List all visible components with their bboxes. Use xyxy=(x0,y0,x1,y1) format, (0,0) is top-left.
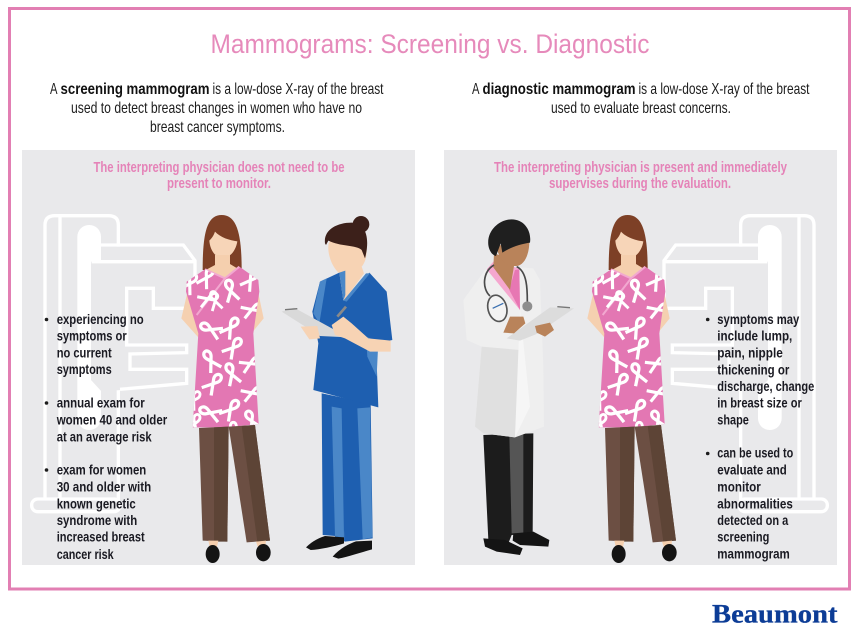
bullet list: screening: symptoms xyxy=(57,362,112,377)
bullet list: diagnostic: mammogram xyxy=(717,546,790,561)
intro text: screening: breast cancer symptoms. xyxy=(150,119,285,136)
bullet list: diagnostic: shape xyxy=(717,412,749,427)
bullet list: screening: cancer risk xyxy=(57,547,114,562)
bullet list: diagnostic: symptoms may xyxy=(717,312,800,327)
bullet list: diagnostic: include lump, xyxy=(717,329,792,344)
bullet list: diagnostic: detected on a xyxy=(717,513,789,528)
icon: mammography machine xyxy=(664,216,827,512)
intro text: screening: screening mammogram xyxy=(60,81,210,98)
panel: screening xyxy=(22,150,415,565)
panel background xyxy=(22,150,415,565)
panel heading: supervises during the evaluation. xyxy=(549,176,731,192)
bullet list: diagnostic xyxy=(706,312,815,561)
bullet list: diagnostic: in breast size or xyxy=(717,396,802,411)
title: Mammograms: Screening vs. Diagnostic xyxy=(210,29,650,59)
intro text: diagnostic: A xyxy=(472,81,480,98)
logo: Beaumont: Beaumont xyxy=(712,598,838,628)
bullet list: diagnostic: thickening or xyxy=(717,362,790,377)
icon: mammography machine xyxy=(32,216,195,512)
bullet list: screening: annual exam for xyxy=(57,396,145,411)
bullet list: screening: known genetic xyxy=(57,496,136,511)
bullet list: screening: exam for women xyxy=(57,462,146,477)
panel heading xyxy=(494,160,787,192)
figure: patient in ribbon gown xyxy=(180,215,271,563)
bullet list: screening: syndrome with xyxy=(57,513,137,528)
intro text: diagnostic xyxy=(472,81,810,117)
figure: patient in ribbon gown xyxy=(586,215,677,563)
bullet list: screening xyxy=(45,312,168,562)
bullet list: diagnostic: monitor xyxy=(717,480,761,495)
bullet list: diagnostic: discharge, change xyxy=(717,379,815,394)
panel heading xyxy=(94,160,344,192)
panel: diagnostic xyxy=(444,150,837,565)
bullet list: screening: women 40 and older xyxy=(56,412,168,427)
bullet list: screening: at an average risk xyxy=(57,430,152,445)
bullet list: screening: 30 and older with xyxy=(57,480,151,495)
bullet list: screening: no current xyxy=(57,345,112,360)
panel background xyxy=(444,150,837,565)
intro text: screening: A xyxy=(50,81,58,98)
intro text: screening: used to detect breast changes in women who have no xyxy=(71,100,362,117)
panel heading: The interpreting physician does not need to be xyxy=(94,160,344,176)
bullet list: diagnostic: pain, nipple xyxy=(717,346,783,361)
intro text: screening xyxy=(50,81,384,136)
bullet list: diagnostic: abnormalities xyxy=(717,496,793,511)
bullet list: screening: increased breast xyxy=(57,530,145,545)
intro text: diagnostic: diagnostic mammogram xyxy=(482,81,636,98)
intro text: diagnostic: used to evaluate breast concerns. xyxy=(551,100,731,117)
bullet list: diagnostic: can be used to xyxy=(717,446,793,461)
panel heading: The interpreting physician is present and immediately xyxy=(494,160,787,176)
intro text: screening: is a low-dose X-ray of the breast xyxy=(212,81,384,98)
bullet list: diagnostic: evaluate and xyxy=(717,462,787,477)
panel heading: present to monitor. xyxy=(167,176,271,192)
bullet list: diagnostic: screening xyxy=(717,530,769,545)
figure: doctor with clipboard xyxy=(463,219,574,555)
figure: nurse with clipboard xyxy=(282,216,392,559)
bullet list: screening: experiencing no xyxy=(57,312,144,327)
bullet list: screening: symptoms or xyxy=(57,329,127,344)
